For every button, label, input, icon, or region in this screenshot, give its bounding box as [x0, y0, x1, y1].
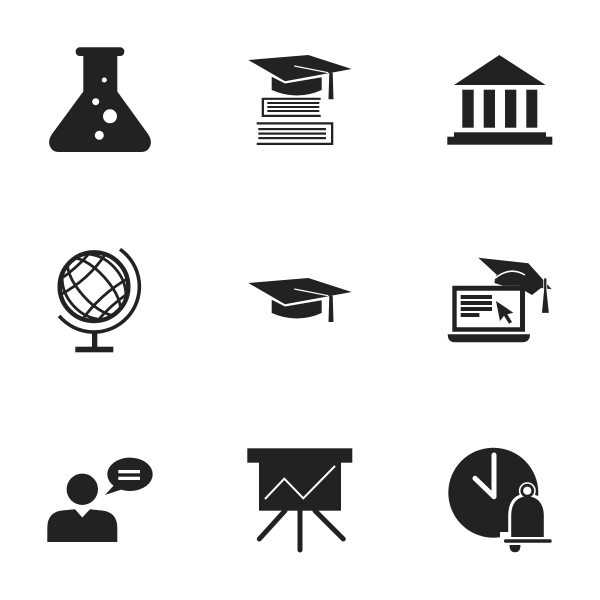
icon: desk globe	[57, 248, 142, 352]
icon: graduation cap	[248, 278, 352, 322]
icon: graduation cap on books	[248, 55, 352, 145]
icon: presentation board with chart	[247, 448, 352, 550]
icon: flask	[49, 47, 151, 152]
icon: clock with bell	[448, 448, 552, 552]
icon: classical building	[447, 55, 552, 145]
icon: laptop with graduation cap	[448, 258, 552, 342]
icon: person with speech bubble	[47, 458, 153, 542]
